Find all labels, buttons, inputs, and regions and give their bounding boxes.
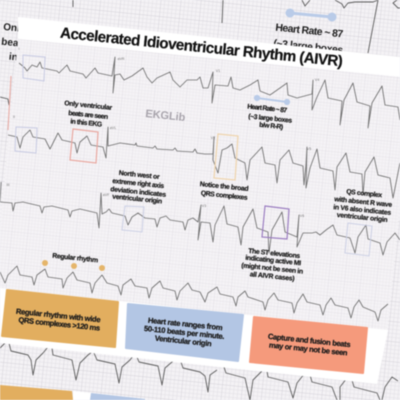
card: capture and fusion beats: may or may not be seen (269, 341, 348, 358)
lead labels: V2 (211, 136, 215, 140)
background text fragment left: beats (1, 37, 28, 50)
annotation: only ventricular beats (64, 100, 113, 129)
annotation: axis deviation: North west or (118, 170, 160, 181)
card: regular rhythm: Regular rhythm with wide (16, 307, 101, 324)
annotation: heart rate: (~3 large boxes (248, 113, 293, 125)
annotation: axis deviation (110, 170, 167, 206)
annotation: ST elevations (241, 248, 303, 283)
background text fragment left: in (8, 52, 18, 63)
heart rate dumbbell (254, 95, 290, 105)
card: capture and fusion beats (250, 317, 367, 373)
annotation: ST elevations: indicating active MI (245, 255, 301, 267)
annotation: ST elevations: (might not be seen in (241, 262, 303, 276)
card: heart rate: Heart rate ranges from (147, 316, 223, 332)
lead labels: aVR (118, 57, 125, 61)
lead labels: I (18, 47, 20, 51)
lead labels: II (13, 115, 15, 119)
highlight box: ventricular beat (70, 129, 98, 163)
card: regular rhythm (2, 290, 118, 347)
title band (18, 17, 400, 77)
ECG row 4 (0, 266, 388, 321)
background bottom white strip with cards (73, 391, 145, 400)
annotation: only ventricular beats: in this EKG (70, 118, 102, 129)
annotation: QS complex: ventricular origin (336, 212, 388, 224)
lead labels: V1 (216, 69, 220, 73)
lead labels: V4 (315, 78, 319, 82)
lead labels: III (6, 183, 10, 187)
background text fragment left (1, 22, 28, 63)
annotation: axis deviation: ventricular origin (112, 193, 162, 206)
annotation: only ventricular beats: Only ventricular (64, 100, 113, 112)
lead labels: aVL (110, 126, 116, 130)
annotation: QS complex (333, 189, 393, 224)
card: heart rate (126, 304, 243, 361)
annotation: heart rate: Heart Rate ~ 87 (247, 104, 288, 115)
background trace bottom (0, 343, 398, 400)
annotation: axis deviation: extreme right axis (112, 178, 165, 190)
lead labels: V3 (202, 204, 206, 208)
highlight box: broad QRS (214, 134, 238, 180)
card: capture and fusion beats: Capture and fusion beats (268, 332, 351, 349)
title: Accelerated Idioventricular Rhythm (AIVR) (59, 25, 344, 70)
annotation: heart rate: b/w R-R) (259, 122, 283, 131)
background heart rate text: (~3 large boxes (273, 38, 344, 57)
highlight box: lead I (23, 55, 45, 81)
card: heart rate: Ventricular origin (154, 334, 212, 348)
highlight box: axis deviation (122, 206, 144, 232)
background heart rate text: Heart Rate ~ 87 (275, 22, 344, 40)
annotation: only ventricular beats: beats are seen (68, 110, 108, 121)
annotation: axis deviation: deviation indicates (110, 186, 167, 199)
highlight box: lead II (15, 127, 37, 153)
annotation: broad QRS: Notice the broad (199, 181, 249, 193)
red edge line (8, 76, 11, 130)
background heart rate text (273, 22, 344, 57)
regular rhythm dots (42, 260, 105, 271)
annotation: broad QRS (199, 181, 249, 202)
card: heart rate: 50-110 beats per minute. (144, 324, 225, 341)
background bottom yellow card (0, 385, 73, 400)
annotation: broad QRS: QRS complexes (200, 190, 248, 202)
background text fragment left: Only (3, 22, 26, 35)
background heart rate dumbbell (286, 9, 336, 21)
ECG grid panel (0, 39, 400, 331)
lead labels (6, 47, 319, 218)
watermark: EKGLib (145, 108, 186, 124)
lead labels: aVF (103, 193, 110, 197)
highlight box: ST elevation (262, 206, 289, 239)
white card strip (0, 288, 388, 384)
background left fragment trace (0, 97, 9, 105)
highlight box: V6 QS complex (345, 223, 372, 256)
annotation: QS complex: in V6 also indicates (333, 204, 392, 217)
annotation: heart rate (247, 104, 293, 131)
annotation: QS complex: with absent R wave (333, 196, 393, 209)
lead labels: V6 (300, 214, 304, 218)
annotation: regular rhythm: Regular rhythm (52, 253, 98, 264)
background ECG traces top (73, 0, 400, 53)
lead labels: V5 (307, 147, 311, 151)
annotation: ST elevations: The ST elevations (248, 248, 301, 260)
card: regular rhythm: QRS complexes >120 ms (18, 315, 100, 333)
ECG row 3 (0, 182, 400, 255)
annotation: ST elevations: all AIVR cases) (249, 271, 295, 283)
ECG row 1 (19, 57, 400, 128)
ECG row 2 (8, 127, 400, 198)
annotation: QS complex: QS complex (346, 189, 383, 199)
